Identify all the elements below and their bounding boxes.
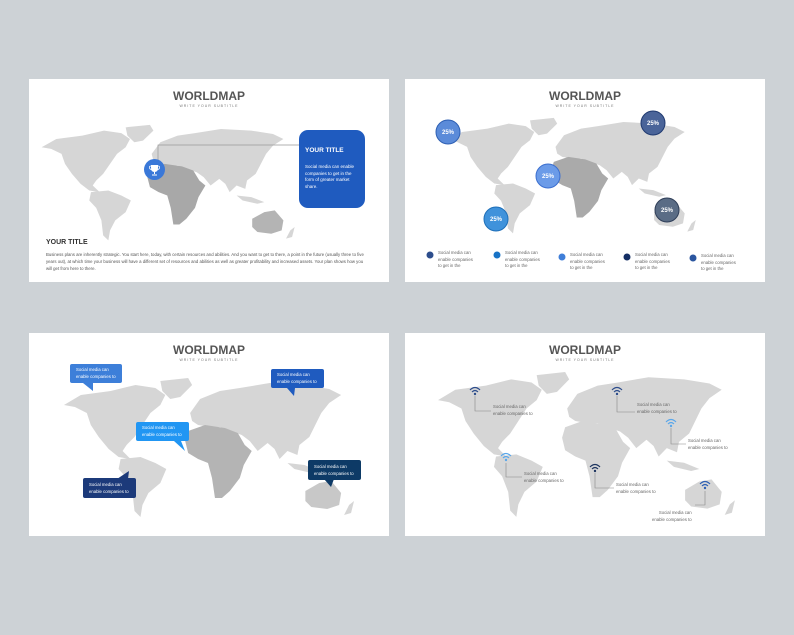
map: [42, 125, 299, 240]
labels: [493, 402, 728, 522]
panel: slide 3: Social media can: [314, 464, 347, 469]
panel: slide 2: enable companies: [570, 258, 605, 264]
map with percentage circles: 25%: [490, 217, 503, 223]
title: WORLDMAP: [173, 89, 245, 103]
panel: slide 3: enable companies to: [76, 374, 116, 378]
panel: slide 2: [405, 79, 765, 282]
title: WORLDMAP: [173, 343, 245, 357]
panel: slide 2: to get in the: [570, 265, 592, 270]
panel: slide 3: enable companies to: [277, 378, 317, 384]
map with percentage circles: 25%: [442, 130, 455, 136]
bubbles: [70, 364, 361, 498]
panel: slide 2: enable companies: [635, 258, 670, 264]
panel: slide 4: Social media can: [688, 438, 721, 443]
panel: slide 2: enable companies: [438, 256, 473, 262]
panel: slide 1: Business plans are inherently strategic. You start here, today, with certain resources and abilities. And you want to get to there, a point in the future (usually three to five years out), at which time your business will have a different set of resources and abilities as well as greater profitability and increased assets. Your plan shows how you will get from here to there.: [46, 252, 364, 271]
panel: slide 3: Social media can: [76, 367, 109, 372]
map with percentage circles: 25%: [661, 208, 674, 214]
panel: slide 4: Social media can: [659, 510, 692, 515]
panel: slide 4: enable companies to: [616, 488, 656, 494]
panel: slide 3: enable companies to: [142, 432, 182, 436]
panel: slide 3: Social media can: [142, 425, 175, 430]
panel: slide 2: enable companies: [701, 260, 736, 264]
subtitle: WRITE YOUR SUBTITLE: [556, 104, 614, 108]
panel: slide 2: enable companies: [505, 256, 540, 262]
panel: slide 4: Social media can: [493, 404, 526, 409]
panel: slide 2: to get in the: [438, 263, 460, 268]
legend: [438, 250, 736, 271]
subtitle: WRITE YOUR SUBTITLE: [180, 104, 238, 108]
panel: slide 4: enable companies to: [652, 516, 692, 522]
panel: slide 4: enable companies to: [688, 444, 728, 450]
icon: trophy: [144, 159, 165, 180]
panel: slide 4: [405, 333, 765, 536]
panel: slide 3: enable companies to: [89, 488, 129, 494]
subtitle: WRITE YOUR SUBTITLE: [180, 358, 238, 362]
panel: slide 2: Social media can: [438, 250, 471, 255]
panel: slide 3: [29, 333, 389, 536]
subtitle: WRITE YOUR SUBTITLE: [556, 358, 614, 362]
map with percentage circles: 25%: [542, 174, 555, 180]
panel: slide 4: Social media can: [616, 482, 649, 487]
panel: slide 1: [29, 79, 389, 282]
map with wifi markers: [438, 372, 735, 517]
panel: slide 3: Social media can: [277, 372, 310, 377]
title: WORLDMAP: [549, 89, 621, 103]
panel: slide 2: to get in the: [505, 263, 527, 268]
panel: slide 4: enable companies to: [493, 410, 533, 416]
panel: slide 4: Social media can: [637, 402, 670, 407]
panel: slide 4: Social media can: [524, 471, 557, 476]
title: WORLDMAP: [549, 343, 621, 357]
map with percentage circles: [426, 110, 696, 262]
panel: slide 2: Social media can: [701, 253, 734, 258]
callout box: [299, 130, 365, 208]
panel: slide 2: Social media can: [505, 250, 538, 255]
panel: slide 2: Social media can: [570, 252, 603, 257]
panel: slide 4: enable companies to: [524, 478, 564, 482]
panel: slide 3: Social media can: [89, 482, 122, 487]
panel: slide 2: to get in the: [701, 266, 723, 271]
panel: slide 2: Social media can: [635, 252, 668, 257]
callout box: Social media can enable companies to get in the form of greater market share.: [305, 164, 354, 188]
panel: slide 2: to get in the: [635, 265, 657, 270]
map with percentage circles: 25%: [647, 121, 660, 127]
map with speech bubbles: [64, 378, 354, 517]
text block: YOUR TITLE: [46, 239, 88, 246]
callout box: YOUR TITLE: [305, 147, 344, 154]
panel: slide 4: enable companies to: [637, 408, 677, 414]
panel: slide 3: enable companies to: [314, 470, 354, 476]
